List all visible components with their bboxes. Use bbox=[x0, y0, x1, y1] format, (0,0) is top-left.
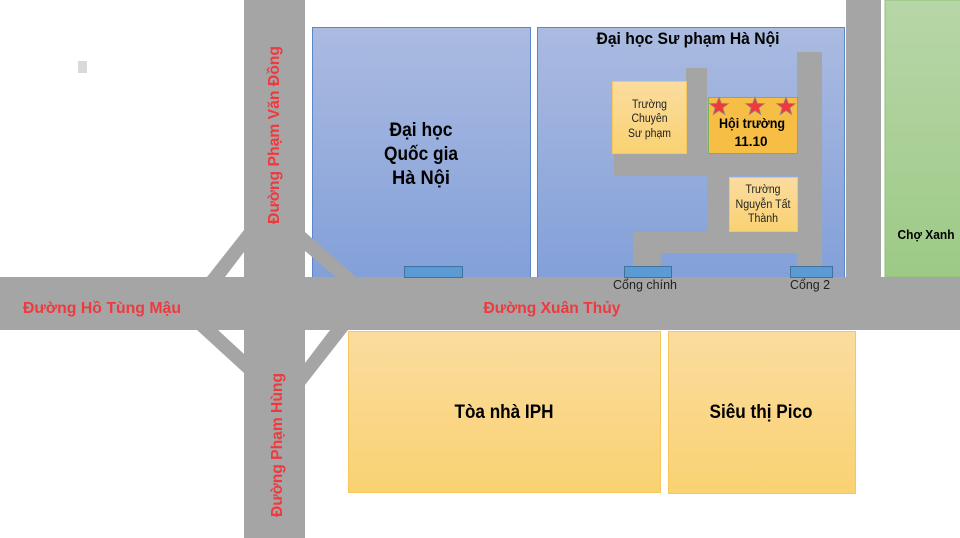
label: Dai hoc: Đại học bbox=[390, 120, 453, 141]
panel: Dai hoc Su pham Ha Noi bbox=[538, 28, 844, 278]
label: Cong chinh: Cổng chính bbox=[613, 277, 677, 292]
small grey square bbox=[78, 61, 87, 73]
label: Chuyen: Chuyên bbox=[632, 113, 668, 125]
gate: Cong chinh bbox=[624, 266, 672, 278]
label: Nguyen Tat: Nguyễn Tất bbox=[736, 198, 791, 211]
road label: Duong Xuan Thuy: Đường Xuân Thủy bbox=[484, 300, 621, 317]
label: Truong: Trường bbox=[632, 99, 667, 111]
road label: Duong Pham Hung: Đường Phạm Hùng bbox=[269, 373, 286, 517]
label: Ha Noi: Hà Nội bbox=[392, 168, 450, 189]
label: Su pham: Sư phạm bbox=[628, 128, 671, 140]
road label: Duong Pham Van Dong: Đường Phạm Văn Đồng bbox=[266, 46, 283, 224]
label: Cong 2: Cổng 2 bbox=[790, 277, 830, 292]
label: Truong: Trường bbox=[746, 184, 780, 196]
panel: Truong Nguyen Tat Thanh bbox=[730, 178, 798, 232]
label: 11.10: 11.10 bbox=[734, 133, 768, 149]
gate: Cong 2 bbox=[790, 266, 832, 278]
gate: left bbox=[404, 266, 462, 278]
label: Cho Xanh: Chợ Xanh bbox=[898, 227, 955, 242]
icon: stars bbox=[710, 97, 796, 115]
panel: Cho Xanh bbox=[885, 0, 960, 277]
label: Toa nha IPH: Tòa nhà IPH bbox=[454, 402, 554, 423]
label: Quoc gia: Quốc gia bbox=[384, 144, 458, 165]
panel: Toa nha IPH bbox=[348, 332, 660, 492]
panel: Truong Chuyen Su pham bbox=[612, 82, 686, 154]
label: Hoi truong: Hội trường bbox=[719, 115, 785, 131]
heading: Dai hoc Su pham Ha Noi: Đại học Sư phạm Hà Nội bbox=[596, 30, 780, 48]
label: Sieu thi Pico: Siêu thị Pico bbox=[710, 402, 812, 423]
panel: Dai hoc Quoc gia Ha Noi bbox=[312, 28, 530, 278]
panel: Sieu thi Pico bbox=[668, 332, 856, 494]
road label: Duong Ho Tung Mau: Đường Hồ Tùng Mậu bbox=[23, 300, 181, 317]
panel: Hoi truong 11.10 bbox=[708, 98, 798, 154]
label: Thanh: Thành bbox=[748, 213, 778, 225]
